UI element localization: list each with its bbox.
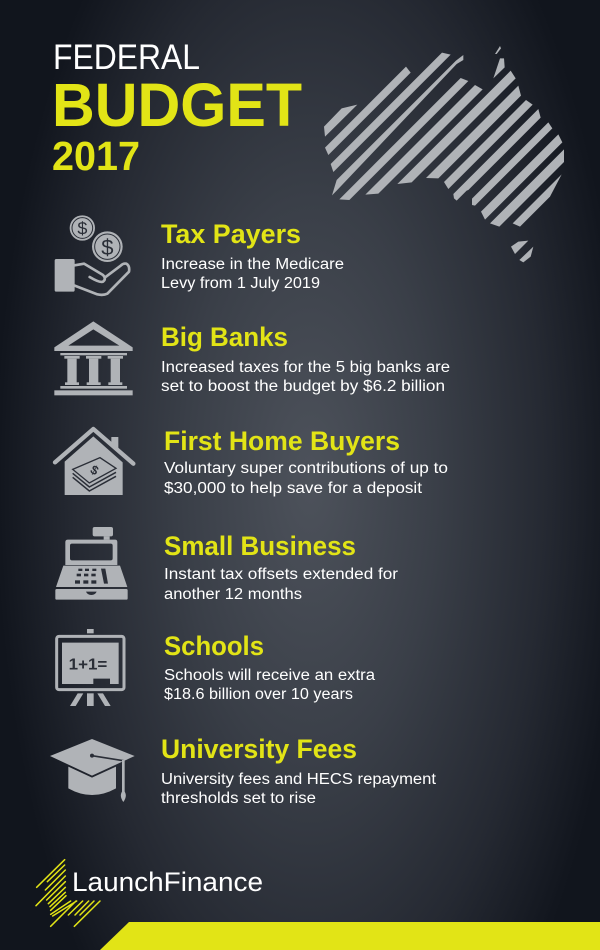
icon: cash register: [55, 527, 128, 600]
description: [164, 566, 398, 603]
title: [52, 38, 302, 179]
heading: First Home Buyers: [164, 426, 400, 456]
description: University fees and HECS repayment: [161, 771, 437, 788]
heading: Tax Payers: [161, 219, 301, 249]
description: another 12 months: [164, 586, 302, 603]
heading: University Fees: [161, 734, 357, 764]
icon: house with money: $: [88, 462, 101, 478]
yellow footer band: [100, 922, 600, 950]
icon: house with money: [55, 429, 133, 495]
item: Tax Payers: [55, 215, 344, 295]
description: [161, 256, 344, 292]
icon: coins and hand: [55, 215, 129, 295]
item: University Fees: [50, 734, 437, 807]
description: $18.6 billion over 10 years: [164, 686, 353, 703]
description: [164, 667, 375, 703]
heading: Small Business: [164, 531, 356, 561]
logo mark: [36, 860, 100, 926]
hand: [55, 259, 129, 295]
heading: Big Banks: [161, 322, 288, 352]
description: Schools will receive an extra: [164, 667, 375, 684]
logo: Launch Finance: [36, 860, 263, 926]
description: Instant tax offsets extended for: [164, 566, 398, 583]
item: Big Banks: [54, 321, 450, 395]
coins: [70, 215, 123, 262]
coins: $: [77, 219, 87, 239]
title line: Federal: FEDERAL: [53, 38, 200, 77]
item: Schools: [57, 629, 375, 706]
description: Voluntary super contributions of up to: [164, 460, 448, 477]
description: thresholds set to rise: [161, 790, 316, 807]
heading: Schools: [164, 631, 264, 661]
striped map of Australia: [324, 46, 564, 262]
description: set to boost the budget by $6.2 billion: [161, 378, 445, 395]
icon: blackboard: 1+1=: [69, 656, 107, 673]
icon: graduation cap: [50, 739, 135, 802]
description: [164, 460, 448, 497]
item: Small Business: [55, 527, 398, 603]
title line: Budget: BUDGET: [52, 71, 302, 139]
item: First Home Buyers: [55, 426, 448, 497]
icon: blackboard: [57, 629, 124, 706]
description: Levy from 1 July 2019: [161, 275, 320, 292]
description: [161, 359, 450, 395]
description: Increase in the Medicare: [161, 256, 344, 273]
coins: $: [101, 235, 113, 260]
title line: 2017: 2017: [52, 133, 140, 179]
icon: bank building: [54, 321, 133, 395]
description: Increased taxes for the 5 big banks are: [161, 359, 450, 376]
logo wordmark: LaunchFinance: [72, 867, 263, 897]
description: [161, 771, 437, 807]
description: $30,000 to help save for a deposit: [164, 480, 423, 497]
